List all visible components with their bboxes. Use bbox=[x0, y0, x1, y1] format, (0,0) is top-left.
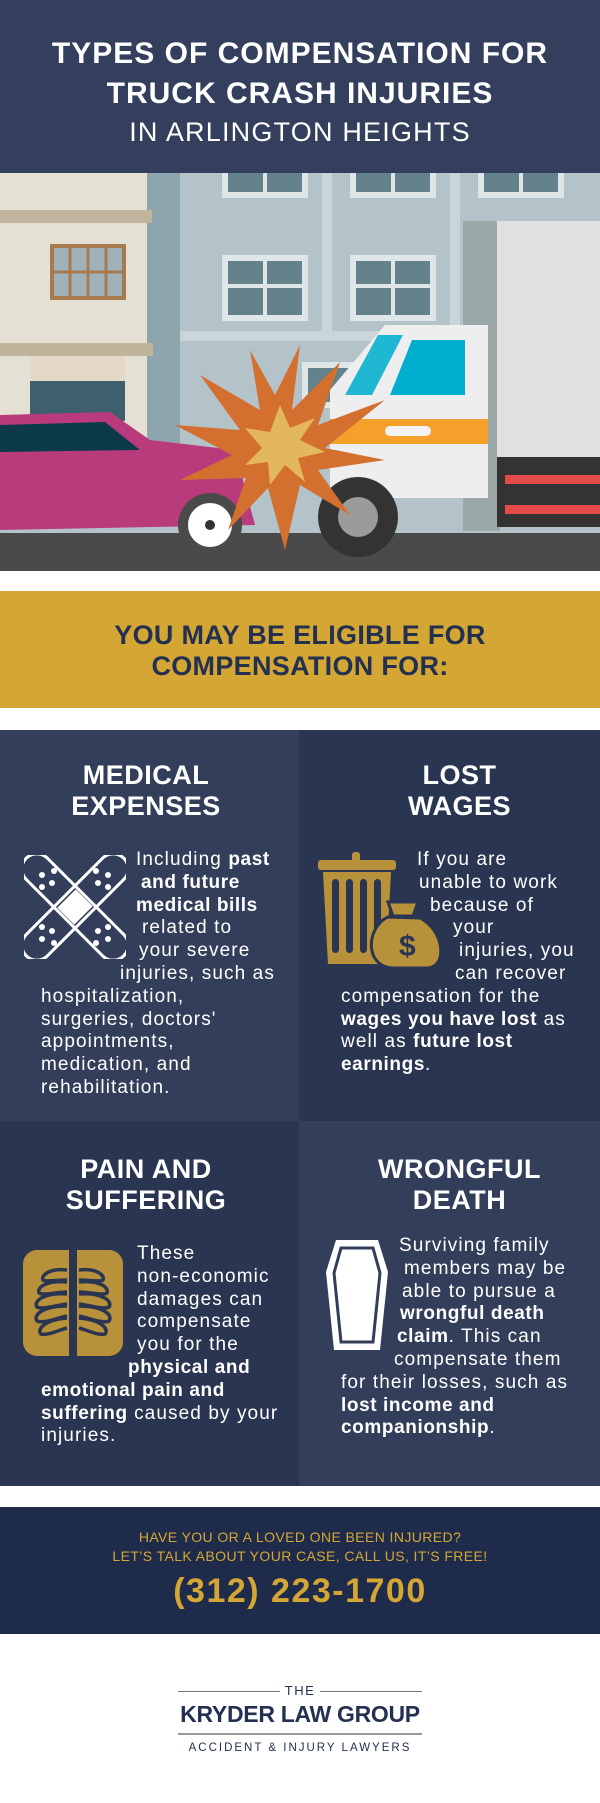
panel: pain and suffering bbox=[0, 1121, 299, 1486]
text: pain and suffering: physical and bbox=[128, 1357, 250, 1378]
text: pain and suffering: suffering caused by your bbox=[41, 1403, 278, 1424]
heading: pain and suffering bbox=[66, 1154, 226, 1215]
text: wrongful death: compensate them bbox=[394, 1349, 562, 1370]
panel: medical expenses bbox=[0, 730, 299, 1121]
text: lost wages: earnings. bbox=[341, 1054, 431, 1075]
logo: kryder law group: THE bbox=[285, 1683, 315, 1698]
header: title: TYPES OF COMPENSATION FOR bbox=[52, 37, 548, 70]
heading: lost wages: LOST bbox=[422, 760, 496, 790]
icon: rib cage x-ray bbox=[23, 1250, 123, 1356]
call to action bbox=[0, 1507, 600, 1634]
text: wrongful death: Surviving family bbox=[399, 1235, 550, 1256]
logo: kryder law group: ACCIDENT & INJURY LAWYERS bbox=[189, 1742, 411, 1754]
heading: wrongful death bbox=[378, 1154, 541, 1215]
text: wrongful death: companionship. bbox=[341, 1417, 496, 1438]
text: pain and suffering: injuries. bbox=[41, 1425, 116, 1446]
text: lost wages: If you are bbox=[417, 849, 507, 870]
heading: lost wages bbox=[408, 760, 511, 821]
heading: wrongful death: DEATH bbox=[413, 1185, 506, 1215]
call to action: LET’S TALK ABOUT YOUR CASE, CALL US, IT’S FREE! bbox=[112, 1548, 488, 1564]
icon: bandages bbox=[24, 855, 126, 959]
illustration: truck crash street scene bbox=[0, 173, 600, 571]
text: pain and suffering: you for the bbox=[137, 1334, 239, 1355]
text: pain and suffering bbox=[41, 1243, 278, 1446]
text: wrongful death: for their losses, such as bbox=[341, 1372, 568, 1393]
text: medical expenses: hospitalization, bbox=[41, 986, 184, 1007]
text: medical expenses: medical bills bbox=[136, 895, 258, 916]
text: lost wages: unable to work bbox=[419, 872, 558, 893]
text: lost wages: because of bbox=[430, 895, 534, 916]
banner: eligible for compensation bbox=[0, 591, 600, 708]
heading: pain and suffering: SUFFERING bbox=[66, 1185, 226, 1215]
text: wrongful death: able to pursue a bbox=[402, 1281, 556, 1302]
text: wrongful death: wrongful death bbox=[400, 1303, 545, 1324]
text: medical expenses: injuries, such as bbox=[120, 963, 275, 984]
heading: medical expenses: EXPENSES bbox=[71, 791, 221, 821]
heading: pain and suffering: PAIN AND bbox=[80, 1154, 212, 1184]
text: pain and suffering: emotional pain and bbox=[41, 1380, 225, 1401]
text: medical expenses: medication, and bbox=[41, 1054, 192, 1075]
text: lost wages bbox=[341, 849, 575, 1075]
text: medical expenses: rehabilitation. bbox=[41, 1077, 171, 1098]
logo: kryder law group: KRYDER LAW GROUP bbox=[180, 1701, 420, 1727]
text: lost wages: injuries, you bbox=[459, 940, 575, 961]
text: lost wages: wages you have lost as bbox=[341, 1009, 566, 1030]
text: lost wages: can recover bbox=[455, 963, 566, 984]
panel: lost wages bbox=[299, 730, 600, 1121]
heading: medical expenses bbox=[71, 760, 221, 821]
banner: eligible for compensation: COMPENSATION FOR: bbox=[151, 651, 449, 681]
call to action: HAVE YOU OR A LOVED ONE BEEN INJURED? bbox=[139, 1529, 461, 1545]
text: pain and suffering: non-economic bbox=[137, 1266, 270, 1287]
header: title: IN ARLINGTON HEIGHTS bbox=[129, 117, 471, 147]
text: wrongful death bbox=[341, 1235, 568, 1438]
text: pain and suffering: These bbox=[137, 1243, 195, 1264]
text: wrongful death: claim. This can bbox=[397, 1326, 542, 1347]
text: medical expenses: appointments, bbox=[41, 1031, 175, 1052]
text: wrongful death: lost income and bbox=[341, 1395, 495, 1416]
heading: lost wages: WAGES bbox=[408, 791, 511, 821]
text: medical expenses: surgeries, doctors' bbox=[41, 1009, 217, 1030]
text: wrongful death: members may be bbox=[404, 1258, 566, 1279]
banner: eligible for compensation: YOU MAY BE ELIGIBLE FOR bbox=[114, 620, 486, 650]
text: lost wages: well as future lost bbox=[341, 1031, 513, 1052]
text: medical expenses bbox=[41, 849, 275, 1098]
icon: trash can and money bag bbox=[318, 852, 440, 966]
logo: kryder law group bbox=[178, 1683, 422, 1754]
text: pain and suffering: compensate bbox=[137, 1311, 252, 1332]
panel: wrongful death bbox=[299, 1121, 600, 1486]
heading: wrongful death: WRONGFUL bbox=[378, 1154, 541, 1184]
text: medical expenses: related to bbox=[142, 917, 232, 938]
text: medical expenses: your severe bbox=[139, 940, 250, 961]
icon: trash can and money bag: $ bbox=[399, 930, 416, 963]
header: title: TRUCK CRASH INJURIES bbox=[107, 77, 493, 110]
text: medical expenses: Including past bbox=[136, 849, 270, 870]
text: pain and suffering: damages can bbox=[137, 1289, 263, 1310]
text: lost wages: your bbox=[453, 917, 494, 938]
phone number: (312) 223-1700 bbox=[173, 1572, 427, 1610]
header: title bbox=[0, 0, 600, 173]
text: medical expenses: and future bbox=[141, 872, 240, 893]
icon: coffin bbox=[326, 1240, 388, 1350]
heading: medical expenses: MEDICAL bbox=[83, 760, 209, 790]
text: lost wages: compensation for the bbox=[341, 986, 540, 1007]
